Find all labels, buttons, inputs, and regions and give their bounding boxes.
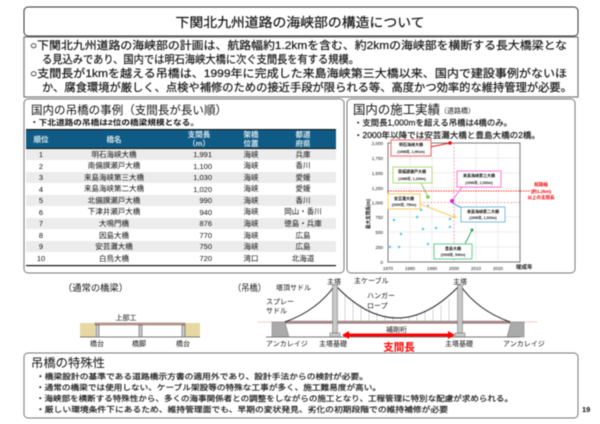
table: 下津井瀬戸大橋: [88, 206, 141, 216]
bullet list: ・橋梁設計の基準である道路橋示方書の適用外であり、設計手法からの検討が必要。: [36, 371, 368, 381]
table: 9: [39, 242, 43, 251]
table: [26, 129, 336, 266]
table: （m）: [188, 139, 210, 148]
table: 1: [39, 150, 43, 159]
table: 南備讃瀬戸大橋: [88, 160, 141, 170]
scatter chart: 2020: [493, 266, 504, 271]
main cable: [285, 285, 510, 322]
table: 広島: [296, 230, 311, 240]
scatter chart: [365, 140, 555, 271]
table: 海峡: [244, 160, 259, 170]
part labels: 主塔: [453, 277, 467, 286]
navigation width note: [528, 181, 555, 201]
diagram: ordinary bridge: 橋脚: [132, 339, 146, 348]
table: 明石海峡大橋: [92, 149, 137, 159]
callout: Kurushima 2: 来島海峡第二大橋: [467, 208, 499, 214]
callout: Akashi Kaikyo: [391, 140, 452, 156]
table: 海峡: [244, 218, 259, 228]
callout: Kurushima 2: [452, 203, 505, 222]
bullet list: ・厳しい環境条件下にあるため、維持管理面でも、早期の変状発見、劣化の初期段階での維持補修が必要: [36, 404, 448, 414]
panel: characteristics of suspension bridges: [24, 353, 578, 418]
table: 位置: [244, 138, 259, 148]
diagram: ordinary bridge: 上部工: [116, 313, 136, 322]
callout: Minami Bisan-Seto: 南備讃瀬戸大橋: [398, 168, 426, 174]
panel heading: （道路橋）: [440, 106, 475, 115]
axis titles: 竣成年: [516, 263, 533, 271]
table: 海峡: [244, 149, 259, 159]
part labels: サドル: [266, 307, 287, 315]
table: 香川: [296, 195, 310, 205]
table: 広島: [296, 241, 311, 251]
table: 海峡: [244, 241, 259, 251]
table: 都道: [296, 129, 311, 139]
callout: Teshima: [434, 228, 474, 259]
table: 876: [199, 219, 212, 228]
table: 府県: [296, 139, 311, 148]
callout: Minami Bisan-Seto: (1988年, 1,100m): [398, 176, 426, 181]
scatter chart: 2010: [471, 266, 482, 271]
table: 北海道: [292, 253, 315, 263]
table: 770: [199, 231, 212, 240]
table: 来島海峡第三大橋: [84, 172, 144, 182]
panel notes: ・2000年以降では安芸灘大橋と豊島大橋の2橋。: [354, 130, 540, 140]
diagram: ordinary bridge: [63, 282, 200, 348]
diagram: suspension bridge: [233, 276, 545, 354]
part labels: [266, 276, 545, 348]
bullet list: ・通常の橋梁では使用しない、ケーブル架設等の特殊な工事が多く、施工難易度が高い。: [36, 382, 381, 392]
callout: Akashi Kaikyo: 明石海峡大橋: [399, 141, 423, 147]
callout: Minami Bisan-Seto: [393, 167, 432, 199]
part labels: 塔頂サドル: [276, 283, 311, 292]
table: 白鳥大橋: [99, 253, 129, 263]
panel: domestic construction record: [347, 99, 575, 273]
bullet list: [36, 371, 513, 414]
panel: overview text: ○支間長が1kmを越える吊橋は、1999年に完成した来島海峡第三大橋以来、国内で建設事例がないほ: [30, 66, 567, 80]
callout: Kurushima 3: (1999年, 1,030m): [465, 180, 493, 185]
scatter chart: 0: [380, 260, 383, 265]
scatter chart: 250: [375, 245, 383, 250]
panel: overview text: ○下関北九州道路の海峡部の計画は、航路幅約1.2kmを含む、約2kmの海峡部を横断する長大橋梁とな: [30, 38, 567, 52]
table: 10: [37, 254, 45, 263]
scatter chart: 1,750: [372, 156, 383, 161]
table: 3: [39, 173, 43, 182]
panel note: ・下北道路の吊橋は2位の橋梁規模となる。: [30, 117, 199, 127]
table: 海峡: [244, 195, 259, 205]
part labels: 主塔: [327, 277, 341, 286]
callout: Teshima: (2008年, 540m): [441, 252, 465, 257]
callout: Kurushima 3: [450, 171, 501, 203]
towers and foundations: [330, 285, 465, 337]
callout: Aki-Nada: [388, 194, 456, 219]
panel: overview text: [24, 37, 578, 97]
axis titles: [365, 199, 533, 271]
table: 兵庫: [296, 149, 311, 159]
table: 大鳴門橋: [99, 218, 129, 228]
table: 7: [39, 219, 43, 228]
hanger ropes: [345, 295, 449, 321]
scatter chart: 1,500: [372, 171, 383, 176]
panel notes: [354, 118, 540, 140]
table: 1,020: [193, 185, 212, 194]
table: 2: [39, 162, 43, 171]
scatter chart: 500: [375, 230, 383, 235]
span arrow: [342, 331, 455, 339]
table: 1,100: [193, 162, 212, 171]
scatter chart: 2,000: [372, 141, 383, 146]
scatter chart: 1990: [427, 266, 438, 271]
part labels: アンカレイジ: [503, 340, 545, 348]
part labels: スプレー: [266, 298, 294, 306]
bullet list: ・海峡部を横断する特殊性から、多くの海事関係者との調整をしながらの施工となり、工程管理に特別な配慮が求められる。: [36, 393, 513, 403]
table: 海峡: [244, 206, 259, 216]
panel heading: 国内の施工実績: [353, 102, 440, 117]
table: 愛媛: [296, 172, 311, 182]
table: 1,030: [193, 173, 212, 182]
table: 6: [39, 208, 43, 217]
scatter chart: 2000: [449, 266, 460, 271]
table: 香川: [296, 160, 310, 170]
navigation width note: (約1.2km): [531, 188, 552, 195]
part labels: 補剛桁: [386, 325, 407, 334]
panel heading: [353, 102, 475, 117]
part labels: アンカレイジ: [266, 340, 308, 348]
part labels: 主塔基礎: [445, 339, 473, 348]
scatter chart: 1,000: [372, 200, 383, 206]
table: 8: [39, 231, 43, 240]
panel heading: 吊橋の特殊性: [31, 355, 105, 370]
table: 愛媛: [296, 183, 311, 193]
diagram: suspension bridge: （吊橋）: [233, 282, 266, 293]
panel heading: 国内の吊橋の事例（支間長が長い順）: [31, 103, 227, 117]
table: 海峡: [244, 183, 259, 193]
scatter chart: 1980: [405, 266, 416, 271]
table: 岡山・香川: [284, 206, 322, 216]
page number: 19: [582, 405, 590, 414]
table: 安芸灘大橋: [95, 241, 133, 251]
navigation width note: 航路幅: [534, 181, 548, 188]
part labels: 主ケーブル: [354, 276, 389, 285]
diagram: ordinary bridge: 橋台: [90, 339, 104, 348]
scatter chart: 750: [375, 215, 383, 220]
callout: Aki-Nada: 安芸灘大橋: [394, 195, 414, 201]
axis titles: 最大支間長(m): [365, 199, 372, 229]
table: 北備讃瀬戸大橋: [88, 195, 141, 205]
table: 750: [199, 242, 212, 251]
table: 720: [199, 254, 212, 263]
panel: overview text: か、腐食環境が厳しく、点検や補修のための接近手段が限られる等、高度かつ効率的な維持管理が必要。: [42, 80, 572, 94]
callout: Aki-Nada: (2000年, 750m): [392, 202, 416, 207]
navigation width note: 以上の支間長: [528, 194, 555, 201]
part labels: 主塔基礎: [319, 339, 347, 348]
table: 4: [39, 185, 43, 194]
table: 湾口: [244, 253, 258, 263]
table: 海峡: [244, 230, 259, 240]
scatter chart: 1970: [383, 266, 394, 271]
stiffening girder: [285, 321, 510, 324]
table: 因島大橋: [99, 230, 129, 240]
title: 下関北九州道路の海峡部の構造について: [176, 15, 424, 30]
diagram: ordinary bridge: （通常の橋梁）: [63, 282, 128, 293]
table: 架橋: [244, 129, 259, 139]
title: [24, 7, 578, 36]
panel: domestic suspension bridge examples: [24, 99, 344, 273]
callout: Kurushima 2: (1999年, 1,020m): [469, 215, 497, 220]
callout: Kurushima 3: 来島海峡第三大橋: [463, 172, 495, 178]
table: 来島海峡第二大橋: [84, 183, 144, 193]
table: 940: [199, 208, 212, 217]
part labels: ロープ: [367, 302, 388, 310]
table: 徳島・兵庫: [284, 218, 322, 228]
scatter chart: 1,250: [372, 186, 383, 191]
callout: Akashi Kaikyo: (1998年, 1,991m): [397, 149, 425, 154]
table: 橋名: [106, 134, 122, 144]
anchorages: [272, 322, 524, 337]
span label: 支間長: [383, 340, 415, 354]
table: 海峡: [244, 172, 259, 182]
panel notes: ・支間長1,000mを超える吊橋は4橋のみ。: [354, 118, 512, 128]
panel: overview text: る見込みであり、国内では明石海峡大橋に次ぐ支間長を有する規模。: [42, 52, 359, 66]
table: 支間長: [188, 129, 211, 139]
diagram: ordinary bridge: 橋台: [176, 339, 190, 348]
table: 1,991: [193, 150, 212, 159]
data points: [389, 205, 451, 248]
table: 順位: [34, 134, 49, 144]
callout: Teshima: 豊島大橋: [445, 245, 461, 251]
part labels: ハンガー: [367, 291, 395, 300]
table: 5: [39, 196, 43, 205]
table: 990: [199, 196, 212, 205]
